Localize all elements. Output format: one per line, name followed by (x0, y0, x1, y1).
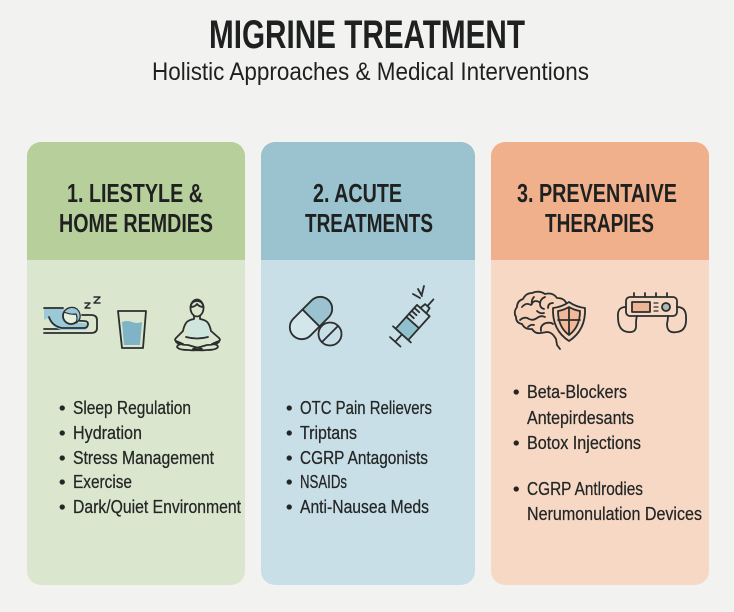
bullet list: lifestyle: • (59, 397, 65, 418)
heading: lifestyle (59, 178, 213, 238)
bullet list: acute (286, 397, 432, 517)
bullet list: preventative: • (513, 432, 519, 453)
bullet list: preventative: Antepirdesants (527, 407, 634, 428)
bullet list: acute: Anti-Nausea Meds (300, 496, 429, 517)
bullet list: lifestyle (59, 397, 241, 517)
heading: preventative (517, 178, 677, 238)
panel: lifestyle and home remedies (27, 142, 245, 585)
bullet list: lifestyle: • (59, 422, 65, 443)
bullet list: acute: • (286, 447, 292, 468)
bullet list: acute: OTC Pain Relievers (300, 397, 432, 418)
bullet list: acute: Triptans (300, 422, 357, 443)
bullet list: lifestyle: • (59, 496, 65, 517)
bullet list: acute: CGRP Antagonists (300, 447, 428, 468)
bullet list: acute: • (286, 422, 292, 443)
subtitle: Holistic Approaches & Medical Interventions (152, 58, 589, 86)
bullet list: preventative: Botox Injections (527, 432, 641, 453)
icon: sleeping person (44, 297, 100, 333)
bullet list: lifestyle: Hydration (73, 422, 142, 443)
heading: preventative: 3. PREVENTAIVE (517, 178, 677, 208)
bullet list: preventative: CGRP Antlrodies (527, 478, 643, 499)
icon: meditating person (175, 300, 220, 350)
panel: preventative therapies (491, 142, 709, 585)
bullet list: lifestyle: Sleep Regulation (73, 397, 191, 418)
bullet list: lifestyle: Stress Management (73, 447, 214, 468)
bullet list: preventative (513, 381, 702, 524)
bullet list: acute: NSAIDs (300, 471, 347, 492)
bullet list: lifestyle: • (59, 471, 65, 492)
icon: glass of water (118, 311, 146, 348)
icon: neuromodulation device (618, 293, 686, 332)
heading: acute: 2. ACUTE (313, 178, 402, 208)
heading: acute (305, 178, 433, 238)
bullet list: acute: • (286, 496, 292, 517)
heading: preventative: THERAPIES (545, 208, 654, 238)
heading: acute: TREATMENTS (305, 208, 433, 238)
heading: lifestyle: HOME REMDIES (59, 208, 213, 238)
bullet list: lifestyle: • (59, 447, 65, 468)
title: MIGRINE TREATMENT (209, 13, 525, 57)
icon: capsule and tablet (285, 292, 342, 346)
bullet list: acute: • (286, 471, 292, 492)
bullet list: preventative: • (513, 381, 519, 402)
bullet list: preventative: Beta-Blockers (527, 381, 627, 402)
bullet list: lifestyle: Exercise (73, 471, 132, 492)
heading: lifestyle: 1. LIESTYLE & (67, 178, 203, 208)
bullet list: preventative: Nerumonulation Devices (527, 503, 702, 524)
icon: brain with shield (515, 292, 585, 349)
panel: acute treatments (261, 142, 475, 585)
bullet list: lifestyle: Dark/Quiet Environment (73, 496, 241, 517)
icon: syringe (386, 286, 442, 350)
bullet list: acute: • (286, 397, 292, 418)
bullet list: preventative: • (513, 478, 519, 499)
